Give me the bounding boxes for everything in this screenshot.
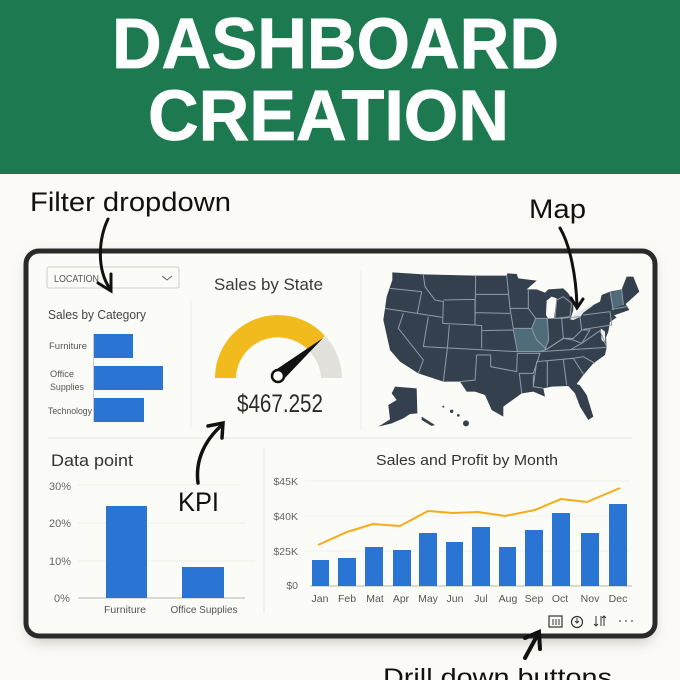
panel: sales by state gauge: Sales by State	[214, 275, 323, 294]
filter dropdown	[47, 267, 179, 288]
panel: data point bar chart: 20%	[49, 518, 71, 530]
panel: data point bar chart: Data point	[51, 451, 133, 470]
panel: sales and profit by month chart: Dec	[609, 593, 627, 605]
filter dropdown: LOCATION	[54, 273, 99, 285]
panel: sales by state gauge: $467.252	[237, 390, 323, 418]
panel: sales and profit by month chart: Jan	[312, 593, 329, 605]
panel: sales and profit by month chart: Sales and Profit by Month	[376, 452, 558, 469]
panel: data point bar chart: 10%	[49, 556, 71, 568]
title banner: DASHBOARD	[112, 5, 559, 84]
panel: sales and profit by month chart: $40K	[273, 511, 298, 523]
panel: sales by state gauge	[214, 275, 342, 418]
arrow: drill down	[525, 632, 540, 658]
panel: data point bar chart: Furniture	[104, 604, 146, 616]
panel: data point bar chart: Office Supplies	[170, 604, 238, 616]
panel: sales by category: Supplies	[50, 382, 84, 392]
panel: sales and profit by month chart: May	[418, 593, 439, 605]
panel: sales and profit by month chart: Jul	[474, 593, 488, 605]
panel: sales and profit by month chart: Apr	[393, 593, 410, 605]
panel: data point bar chart	[49, 451, 255, 616]
title banner	[0, 0, 680, 174]
panel: data point bar chart: 0%	[54, 593, 70, 605]
label: map: Map	[529, 194, 586, 224]
panel: sales by category	[48, 307, 163, 422]
panel: sales by category: Furniture	[49, 341, 87, 351]
panel: sales and profit by month chart: $25K	[273, 546, 298, 558]
panel: sales and profit by month chart: $0	[286, 580, 298, 592]
arrow: filter dropdown	[98, 219, 111, 291]
title banner: CREATION	[148, 77, 509, 156]
drill down buttons	[549, 616, 633, 628]
panel: sales and profit by month chart: Nov	[581, 593, 600, 605]
panel: sales and profit by month chart: Jun	[447, 593, 464, 605]
label: KPI: KPI	[178, 487, 219, 517]
panel: sales and profit by month chart: $45K	[273, 476, 298, 488]
panel: sales and profit by month chart: Mat	[366, 593, 384, 605]
label: filter dropdown: Filter dropdown	[30, 187, 231, 217]
panel: data point bar chart: 30%	[49, 481, 71, 493]
dashboard frame	[26, 251, 655, 642]
panel: sales by category: Office	[50, 369, 74, 379]
arrow: KPI	[197, 423, 223, 483]
panel: sales and profit by month chart: Aug	[499, 593, 517, 605]
panel: sales and profit by month chart: Oct	[552, 593, 568, 605]
panel: sales and profit by month chart	[273, 452, 632, 605]
map of the United States	[378, 272, 639, 427]
panel: sales by category: Sales by Category	[48, 307, 146, 322]
panel: sales by category: Technology	[48, 406, 92, 416]
arrow: map	[560, 228, 583, 308]
panel: sales and profit by month chart: Feb	[338, 593, 356, 605]
panel: sales and profit by month chart: Sep	[525, 593, 543, 605]
